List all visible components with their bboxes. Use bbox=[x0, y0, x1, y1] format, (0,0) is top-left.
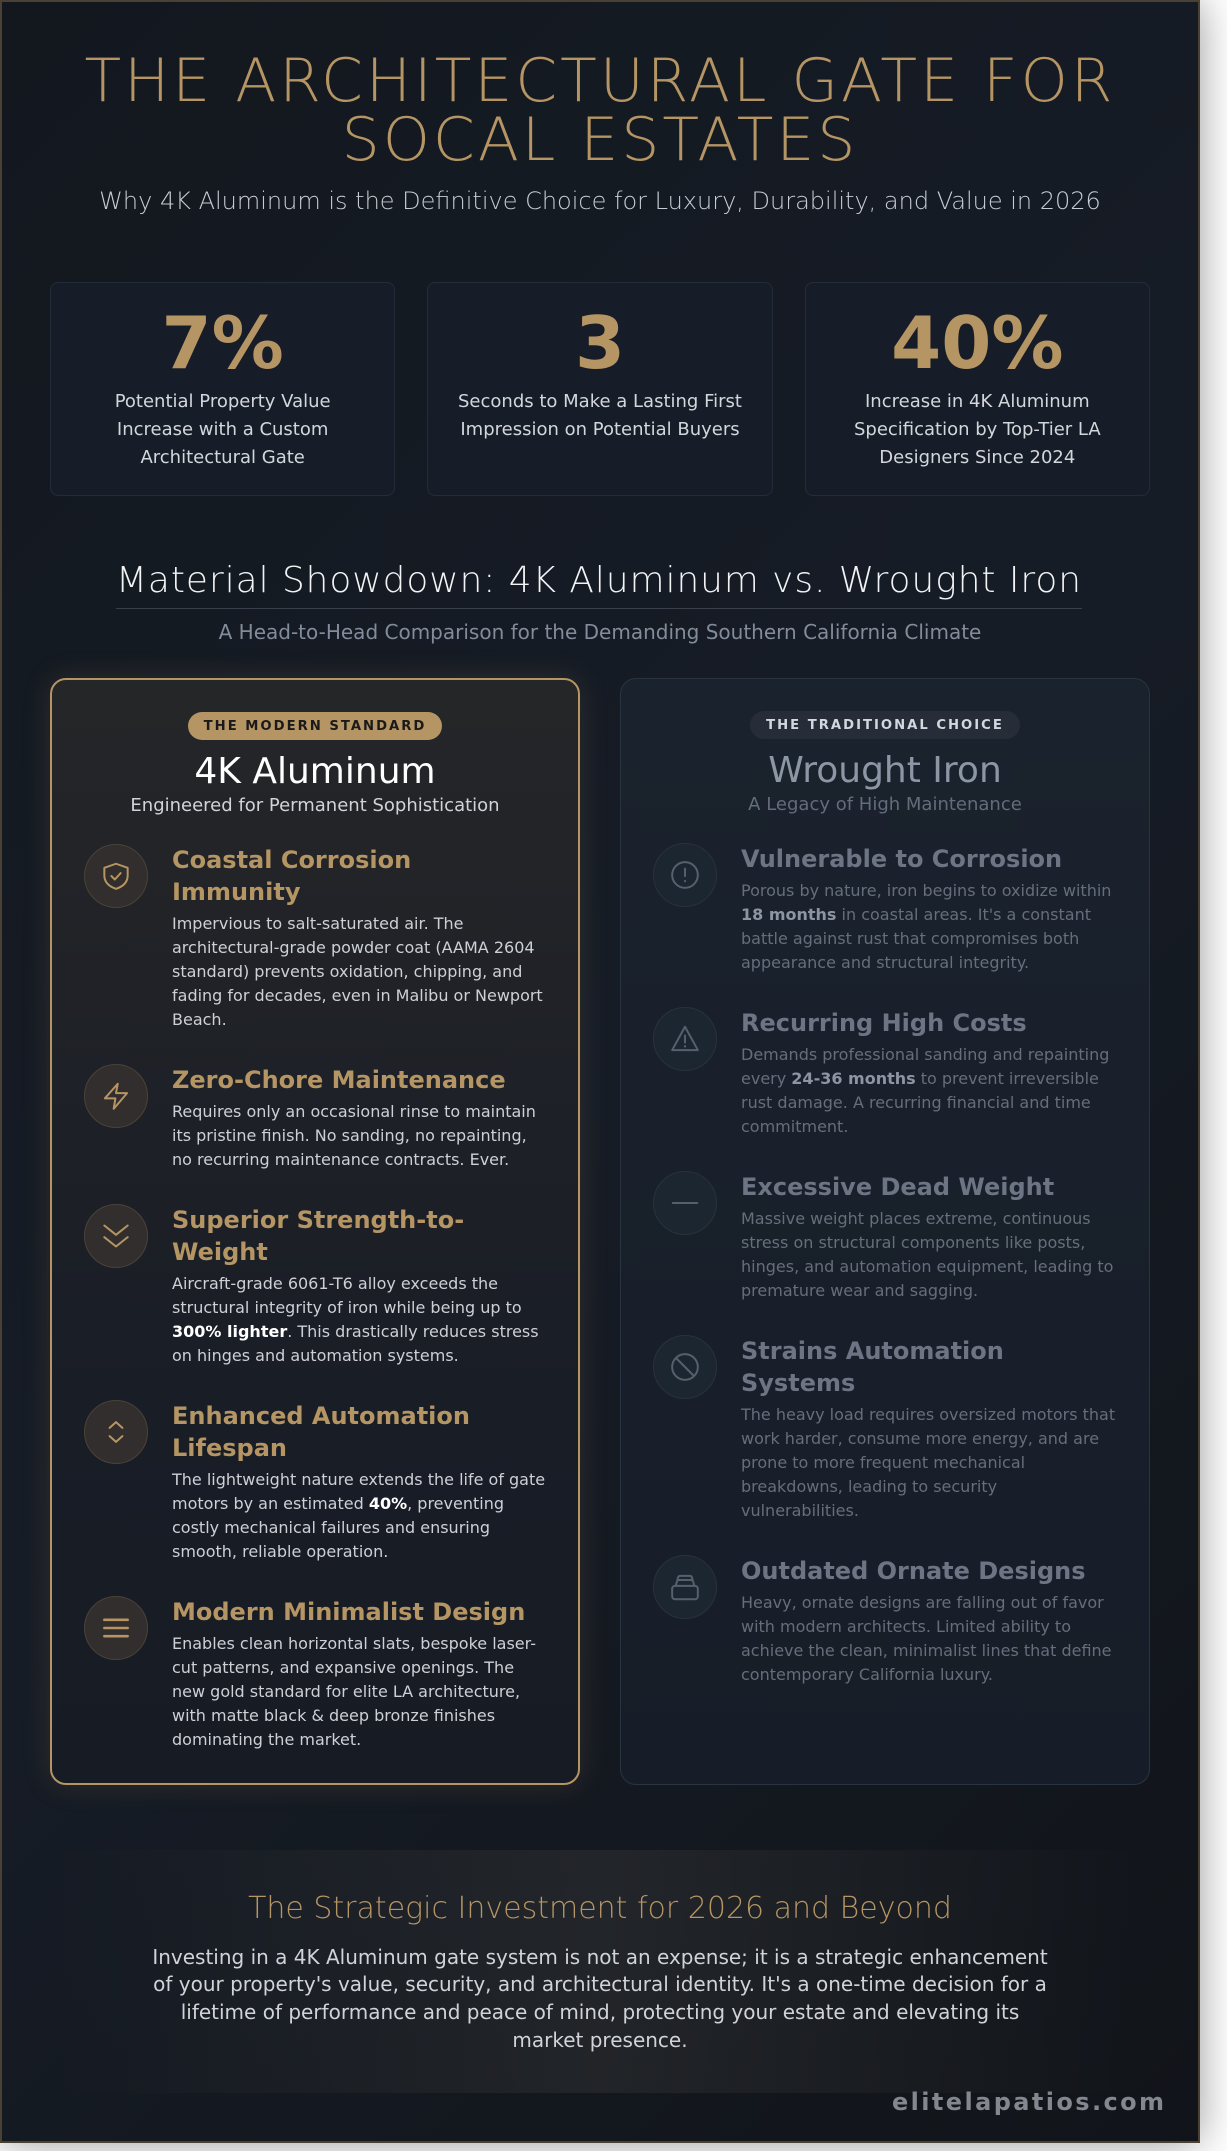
benefit: enhanced automation lifespan: Lifespan bbox=[172, 1434, 287, 1462]
drawback: strains automation systems: The heavy load requires oversized motors that bbox=[741, 1405, 1115, 1424]
stat label: Impression on Potential Buyers bbox=[460, 419, 740, 440]
benefit: coastal corrosion immunity: standard) prevents oxidation, chipping, and bbox=[172, 962, 522, 981]
drawback: vulnerable to corrosion: 18 months in coastal areas. It's a constant bbox=[741, 905, 1091, 924]
stat value: 3 bbox=[575, 301, 625, 385]
icon: up and down chevrons bbox=[84, 1400, 148, 1464]
drawback: recurring high costs: Demands professional sanding and repainting bbox=[741, 1045, 1109, 1064]
drawback: vulnerable to corrosion: Porous by nature, iron begins to oxidize within bbox=[741, 881, 1111, 900]
stat label: Architectural Gate bbox=[140, 447, 305, 468]
icon: lightning bolt bbox=[84, 1064, 148, 1128]
panel subheading: A Legacy of High Maintenance bbox=[748, 794, 1022, 815]
benefit: superior strength-to-weight: on hinges and automation systems. bbox=[172, 1346, 459, 1365]
drawback: outdated ornate designs: Heavy, ornate designs are falling out of favor bbox=[741, 1593, 1104, 1612]
drawback: outdated ornate designs: with modern architects. Limited ability to bbox=[741, 1617, 1071, 1636]
benefit: coastal corrosion immunity: Immunity bbox=[172, 878, 300, 906]
title: THE ARCHITECTURAL GATE FOR bbox=[85, 46, 1115, 116]
drawback: strains automation systems bbox=[653, 1335, 1115, 1520]
icon: alert circle bbox=[653, 843, 717, 907]
drawback: outdated ornate designs: Outdated Ornate Designs bbox=[741, 1557, 1086, 1585]
drawback: vulnerable to corrosion: Vulnerable to Corrosion bbox=[741, 845, 1062, 873]
icon: three horizontal bars bbox=[84, 1596, 148, 1660]
website watermark: elitelapatios.com bbox=[892, 2088, 1166, 2116]
subtitle: Why 4K Aluminum is the Definitive Choice for Luxury, Durability, and Value in 2026 bbox=[99, 187, 1101, 215]
stat value: 40% bbox=[891, 301, 1063, 385]
conclusion text: of your property's value, security, and architectural identity. It's a one-time decision for a bbox=[153, 1972, 1047, 1996]
drawback: strains automation systems: work harder, consume more energy, and are bbox=[741, 1429, 1099, 1448]
benefit: modern minimalist design: new gold standard for elite LA architecture, bbox=[172, 1682, 520, 1701]
panel heading: Wrought Iron bbox=[768, 750, 1002, 791]
title bbox=[85, 46, 1115, 175]
badge bbox=[188, 712, 442, 740]
benefit: modern minimalist design: with matte black & deep bronze finishes bbox=[172, 1706, 495, 1725]
drawback: excessive dead weight: Excessive Dead Weight bbox=[741, 1173, 1054, 1201]
icon: warning triangle bbox=[653, 1007, 717, 1071]
benefit: zero-chore maintenance: Zero-Chore Maintenance bbox=[172, 1066, 506, 1094]
drawback: recurring high costs bbox=[653, 1007, 1109, 1136]
conclusion text: Investing in a 4K Aluminum gate system is not an expense; it is a strategic enhancement bbox=[152, 1944, 1048, 1968]
title: SOCAL ESTATES bbox=[342, 105, 858, 175]
benefit: modern minimalist design: Enables clean horizontal slats, bespoke laser- bbox=[172, 1634, 536, 1653]
section heading: Material Showdown: 4K Aluminum vs. Wrought Iron bbox=[116, 560, 1082, 601]
stat card: 40% bbox=[805, 282, 1150, 496]
benefit: zero-chore maintenance: Requires only an occasional rinse to maintain bbox=[172, 1102, 536, 1121]
benefit: modern minimalist design: cut patterns, and expansive openings. The bbox=[172, 1658, 514, 1677]
drawback: vulnerable to corrosion: battle against rust that compromises both bbox=[741, 929, 1079, 948]
panel: Wrought Iron bbox=[620, 678, 1150, 1785]
benefit: enhanced automation lifespan: The lightweight nature extends the life of gate bbox=[172, 1470, 545, 1489]
benefit: zero-chore maintenance: its pristine finish. No sanding, no repainting, bbox=[172, 1126, 527, 1145]
icon: double chevron down bbox=[84, 1204, 148, 1268]
stat label: Designers Since 2024 bbox=[879, 447, 1075, 468]
conclusion text: market presence. bbox=[512, 2028, 688, 2052]
benefit: superior strength-to-weight: Weight bbox=[172, 1238, 268, 1266]
stat label bbox=[854, 391, 1101, 468]
icon: shield check bbox=[84, 844, 148, 908]
stat label: Potential Property Value bbox=[115, 391, 331, 412]
panel heading: 4K Aluminum bbox=[194, 751, 436, 792]
panel: conclusion bbox=[50, 1850, 1150, 2093]
stat label: Seconds to Make a Lasting First bbox=[458, 391, 742, 412]
section subheading: A Head-to-Head Comparison for the Demanding Southern California Climate bbox=[219, 620, 981, 644]
drawback: recurring high costs: rust damage. A recurring financial and time bbox=[741, 1093, 1091, 1112]
icon: prohibited circle bbox=[653, 1335, 717, 1399]
stat card: 7% bbox=[50, 282, 395, 496]
benefit: enhanced automation lifespan: motors by an estimated 40%, preventing bbox=[172, 1494, 504, 1513]
stat label bbox=[458, 391, 742, 440]
benefit: enhanced automation lifespan bbox=[84, 1400, 545, 1561]
benefit: modern minimalist design: dominating the market. bbox=[172, 1730, 361, 1749]
benefit: coastal corrosion immunity: architectural-grade powder coat (AAMA 2604 bbox=[172, 938, 535, 957]
drawback: excessive dead weight: Massive weight places extreme, continuous bbox=[741, 1209, 1091, 1228]
conclusion heading: The Strategic Investment for 2026 and Beyond bbox=[248, 1891, 952, 1926]
benefit: coastal corrosion immunity: Coastal Corrosion bbox=[172, 846, 411, 874]
benefit: superior strength-to-weight: structural integrity of iron while being up to bbox=[172, 1298, 522, 1317]
benefit: enhanced automation lifespan: costly mechanical failures and ensuring bbox=[172, 1518, 490, 1537]
drawback: outdated ornate designs: achieve the clean, minimalist lines that define bbox=[741, 1641, 1112, 1660]
benefit: superior strength-to-weight bbox=[84, 1204, 539, 1365]
drawback: excessive dead weight bbox=[653, 1171, 1113, 1300]
drawback: vulnerable to corrosion: appearance and structural integrity. bbox=[741, 953, 1029, 972]
conclusion text bbox=[152, 1944, 1048, 2052]
drawback: strains automation systems: prone to more frequent mechanical bbox=[741, 1453, 1025, 1472]
drawback: recurring high costs: commitment. bbox=[741, 1117, 848, 1136]
stat label: Increase in 4K Aluminum bbox=[865, 391, 1090, 412]
panel: 4K Aluminum bbox=[50, 678, 580, 1785]
drawback: vulnerable to corrosion bbox=[653, 843, 1111, 972]
drawback: recurring high costs: every 24-36 months to prevent irreversible bbox=[741, 1069, 1099, 1088]
drawback: outdated ornate designs: contemporary California luxury. bbox=[741, 1665, 993, 1684]
drawback: excessive dead weight: hinges, and automation equipment, leading to bbox=[741, 1257, 1113, 1276]
benefit: superior strength-to-weight: Superior Strength-to- bbox=[172, 1206, 464, 1234]
badge: THE MODERN STANDARD bbox=[204, 719, 426, 734]
benefit: coastal corrosion immunity: Impervious to salt-saturated air. The bbox=[172, 914, 464, 933]
drawback: excessive dead weight: premature wear and sagging. bbox=[741, 1281, 978, 1300]
benefit: modern minimalist design bbox=[84, 1596, 536, 1749]
stat label: Specification by Top-Tier LA bbox=[854, 419, 1101, 440]
stat value: 7% bbox=[162, 301, 284, 385]
conclusion text: lifetime of performance and peace of mind, protecting your estate and elevating its bbox=[181, 2000, 1019, 2024]
badge bbox=[750, 711, 1020, 739]
benefit: enhanced automation lifespan: smooth, reliable operation. bbox=[172, 1542, 388, 1561]
drawback: strains automation systems: Strains Automation bbox=[741, 1337, 1004, 1365]
drawback: excessive dead weight: stress on structural components like posts, bbox=[741, 1233, 1085, 1252]
stat label bbox=[115, 391, 331, 468]
drawback: recurring high costs: Recurring High Costs bbox=[741, 1009, 1027, 1037]
drawback: strains automation systems: vulnerabilities. bbox=[741, 1501, 859, 1520]
drawback: strains automation systems: breakdowns, leading to security bbox=[741, 1477, 997, 1496]
benefit: modern minimalist design: Modern Minimalist Design bbox=[172, 1598, 525, 1626]
benefit: zero-chore maintenance: no recurring maintenance contracts. Ever. bbox=[172, 1150, 509, 1169]
icon: minus bbox=[653, 1171, 717, 1235]
panel subheading: Engineered for Permanent Sophistication bbox=[130, 795, 500, 816]
benefit: enhanced automation lifespan: Enhanced Automation bbox=[172, 1402, 470, 1430]
stat label: Increase with a Custom bbox=[117, 419, 328, 440]
benefit: coastal corrosion immunity: fading for decades, even in Malibu or Newport bbox=[172, 986, 543, 1005]
stat card: 3 seconds bbox=[427, 282, 773, 496]
benefit: superior strength-to-weight: 300% lighter. This drastically reduces stress bbox=[172, 1322, 539, 1341]
benefit: coastal corrosion immunity bbox=[84, 844, 543, 1029]
drawback: outdated ornate designs bbox=[653, 1555, 1112, 1684]
drawback: strains automation systems: Systems bbox=[741, 1369, 855, 1397]
icon: stacked blocks bbox=[653, 1555, 717, 1619]
benefit: superior strength-to-weight: Aircraft-grade 6061-T6 alloy exceeds the bbox=[172, 1274, 498, 1293]
benefit: zero-chore maintenance bbox=[84, 1064, 536, 1169]
benefit: coastal corrosion immunity: Beach. bbox=[172, 1010, 227, 1029]
badge: THE TRADITIONAL CHOICE bbox=[766, 718, 1004, 733]
